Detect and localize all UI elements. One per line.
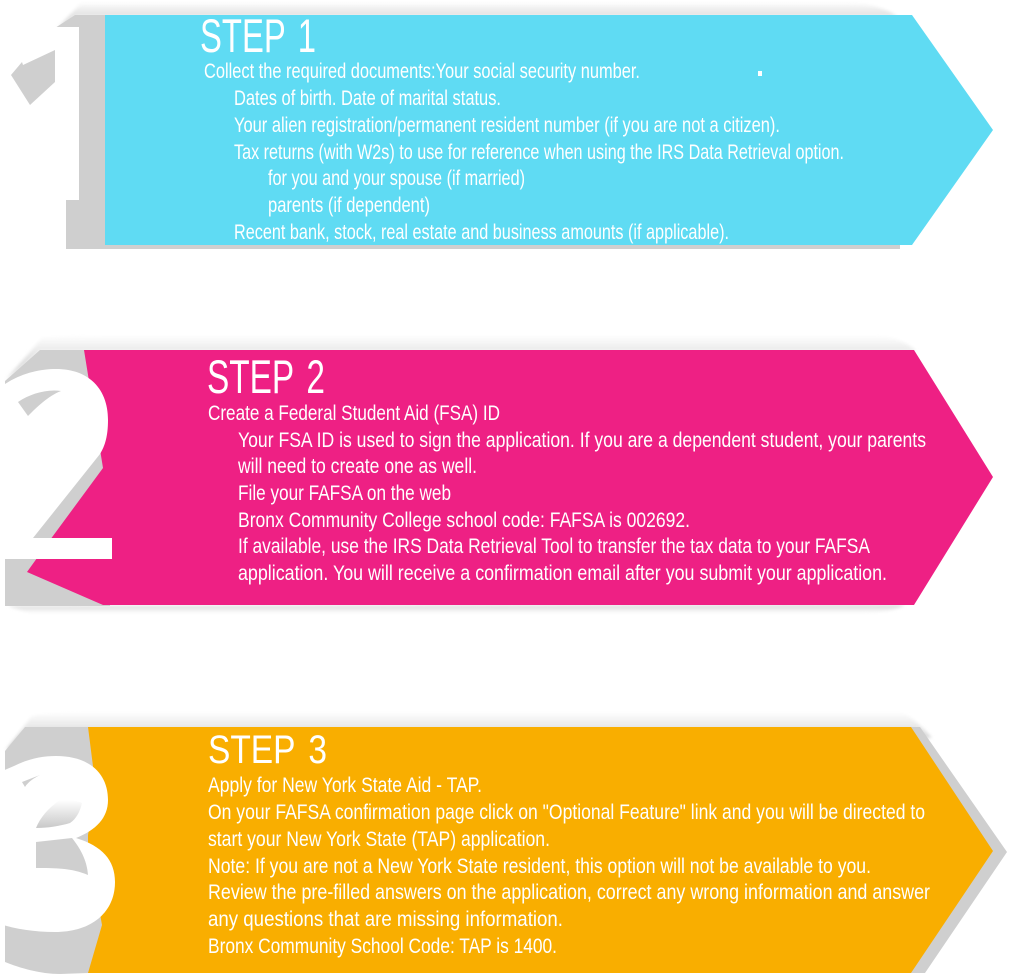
text block: step 1: parents (if dependent)	[268, 194, 430, 217]
panel: step 3	[0, 712, 1007, 974]
shadow: step 1	[58, 2, 897, 28]
numeral backing: step 2	[5, 350, 110, 606]
text block: step 3	[208, 774, 930, 958]
numeral: 1	[0, 27, 79, 200]
text block: step 3: any questions that are missing information.	[208, 908, 563, 931]
text block: step 3: start your New York State (TAP) application.	[208, 828, 550, 851]
numeral backing: step 3	[5, 727, 1007, 974]
text block: step 1: Dates of birth. Date of marital status.	[234, 87, 501, 110]
text block: step 2	[208, 402, 926, 585]
text block: step 1: Tax returns (with W2s) to use for reference when using the IRS Data Retrieval option.	[234, 141, 844, 164]
text block: step 2: If available, use the IRS Data Retrieval Tool to transfer the tax data to your FAFSA	[238, 535, 870, 558]
numeral backing: step 1	[55, 15, 900, 249]
numeral: 2	[0, 369, 112, 559]
text block: step 2: Create a Federal Student Aid (FSA) ID	[208, 402, 500, 425]
text block: step 3: Apply for New York State Aid - TAP.	[208, 774, 482, 797]
shadow: step 3	[6, 712, 932, 750]
numeral: 3	[0, 756, 115, 932]
heading: step 2: STEP 2	[207, 350, 325, 403]
arrow: step 1	[105, 15, 993, 245]
text block: step 3: Note: If you are not a New York State resident, this option will not be available to you.	[208, 855, 871, 878]
panel: step 1	[0, 2, 993, 249]
text block: step 1	[204, 60, 844, 244]
text block: step 1: for you and your spouse (if married)	[268, 167, 525, 190]
panel: step 2	[0, 335, 993, 613]
text block: step 2: will need to create one as well.	[237, 455, 477, 478]
text block: step 2: application. You will receive a confirmation email after you submit your application.	[238, 562, 887, 585]
text block: step 1: Recent bank, stock, real estate and business amounts (if applicable).	[234, 221, 729, 244]
text block: step 2: Bronx Community College school code: FAFSA is 002692.	[238, 509, 690, 532]
arrow: step 3	[88, 727, 993, 973]
arrow: step 2	[27, 350, 993, 605]
shadow: step 2	[6, 335, 916, 380]
text block: step 1: Your alien registration/permanent resident number (if you are not a citizen).	[234, 114, 780, 137]
text block: step 3: Bronx Community School Code: TAP is 1400.	[208, 935, 557, 958]
heading: step 1: STEP 1	[200, 9, 316, 62]
heading: step 3: STEP 3	[208, 728, 327, 772]
text block: step 1: Collect the required documents:Your social security number.	[204, 60, 640, 83]
text block: step 2: File your FAFSA on the web	[238, 482, 451, 505]
